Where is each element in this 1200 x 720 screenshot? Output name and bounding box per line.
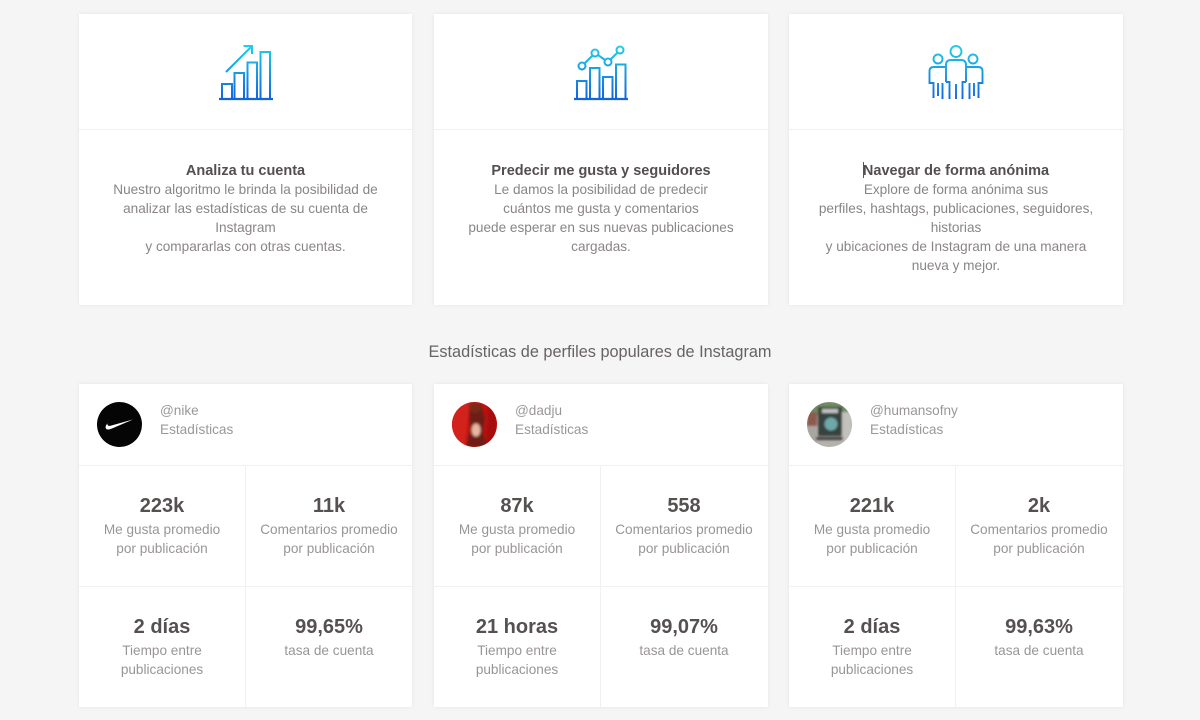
profile name: nike: Estadísticas bbox=[160, 422, 233, 437]
panel: humansofny stats bbox=[789, 384, 1123, 707]
avatar: dadju bbox=[452, 402, 497, 447]
stat: likes bbox=[814, 495, 930, 556]
stat: comments bbox=[970, 495, 1108, 556]
stat: comments: por publicación bbox=[283, 541, 375, 556]
profile name: nike bbox=[160, 403, 233, 437]
stat: time: Tiempo entre bbox=[477, 643, 557, 658]
stat: likes bbox=[104, 495, 220, 556]
stat: likes: Me gusta promedio bbox=[459, 522, 575, 537]
stat: likes bbox=[459, 495, 575, 556]
avatar: humansofny bbox=[807, 402, 852, 447]
stat: comments: 558 bbox=[667, 495, 701, 517]
stat: rate bbox=[994, 616, 1084, 658]
text: analiza tu cuenta: analizar las estadísticas de su cuenta de bbox=[123, 201, 368, 216]
text: predecir me gusta: Predecir me gusta y seguidores bbox=[491, 163, 711, 179]
stat: time bbox=[476, 616, 558, 677]
stat: likes: por publicación bbox=[826, 541, 918, 556]
stat: time: Tiempo entre bbox=[122, 643, 202, 658]
profile name: nike: @nike bbox=[160, 403, 199, 418]
stat: rate: tasa de cuenta bbox=[639, 643, 729, 658]
stat: rate: 99,07% bbox=[650, 616, 718, 638]
stat: time bbox=[121, 616, 203, 677]
stat: comments: Comentarios promedio bbox=[970, 522, 1108, 537]
profile name: dadju: Estadísticas bbox=[515, 422, 588, 437]
text: navegar de forma anonima bbox=[819, 163, 1093, 273]
stat: rate bbox=[284, 616, 374, 658]
stat: time: publicaciones bbox=[476, 662, 558, 677]
panel: analiza tu cuenta bbox=[79, 14, 412, 305]
profile name: dadju: @dadju bbox=[515, 403, 562, 418]
text: analiza tu cuenta bbox=[113, 163, 378, 254]
stat: likes: 87k bbox=[500, 495, 534, 517]
text: analiza tu cuenta: Analiza tu cuenta bbox=[186, 163, 305, 179]
avatar: nike bbox=[97, 402, 142, 447]
stat: time: 2 días bbox=[844, 616, 900, 638]
panel: predecir me gusta y seguidores bbox=[434, 14, 768, 305]
text: navegar de forma anonima: perfiles, hashtags, publicaciones, seguidores, bbox=[819, 201, 1093, 216]
stat: likes: por publicación bbox=[471, 541, 563, 556]
stat: comments: por publicación bbox=[993, 541, 1085, 556]
text: navegar de forma anonima: nueva y mejor. bbox=[912, 258, 1000, 273]
text: predecir me gusta bbox=[468, 163, 734, 254]
stat: likes: 221k bbox=[850, 495, 894, 517]
stat: rate: 99,63% bbox=[1005, 616, 1073, 638]
text: predecir me gusta: cargadas. bbox=[571, 239, 631, 254]
stat: time: Tiempo entre bbox=[832, 643, 912, 658]
text: navegar de forma anonima: historias bbox=[931, 220, 981, 235]
icon: bar chart with line bbox=[574, 46, 628, 100]
stat: rate: tasa de cuenta bbox=[284, 643, 374, 658]
stat: comments: Comentarios promedio bbox=[260, 522, 398, 537]
text: analiza tu cuenta: y compararlas con otras cuentas. bbox=[145, 239, 346, 254]
stat: comments bbox=[615, 495, 753, 556]
heading: popular profiles: Estadísticas de perfiles populares de Instagram bbox=[428, 343, 772, 361]
panel: nike stats bbox=[79, 384, 412, 707]
panel: navegar de forma anonima bbox=[789, 14, 1123, 305]
stat: comments: Comentarios promedio bbox=[615, 522, 753, 537]
profile name: humansofny: Estadísticas bbox=[870, 422, 943, 437]
stat: time: publicaciones bbox=[121, 662, 203, 677]
text: navegar de forma anonima: y ubicaciones de Instagram de una manera bbox=[826, 239, 1086, 254]
text: predecir me gusta: Le damos la posibilidad de predecir bbox=[494, 182, 708, 197]
stat: likes: Me gusta promedio bbox=[104, 522, 220, 537]
stat: rate: 99,65% bbox=[295, 616, 363, 638]
stat: comments: 11k bbox=[313, 495, 345, 517]
text: analiza tu cuenta: Nuestro algoritmo le brinda la posibilidad de bbox=[113, 182, 378, 197]
profile name: humansofny bbox=[870, 403, 958, 437]
text: navegar de forma anonima: Navegar de forma anónima bbox=[863, 163, 1049, 179]
stat: rate: tasa de cuenta bbox=[994, 643, 1084, 658]
stat: comments bbox=[260, 495, 398, 556]
stat: time bbox=[831, 616, 913, 677]
stat: likes: 223k bbox=[140, 495, 184, 517]
profile name: humansofny: @humansofny bbox=[870, 403, 958, 418]
stat: time: 21 horas bbox=[476, 616, 558, 638]
stat: rate bbox=[639, 616, 729, 658]
icon: group of people bbox=[928, 45, 984, 99]
panel: dadju stats bbox=[434, 384, 768, 707]
profile name: dadju bbox=[515, 403, 588, 437]
stat: comments: 2k bbox=[1028, 495, 1050, 517]
text: navegar de forma anonima: Explore de forma anónima sus bbox=[864, 182, 1048, 197]
text: predecir me gusta: cuántos me gusta y comentarios bbox=[503, 201, 699, 216]
text cursor bbox=[862, 162, 864, 178]
icon: growth bar chart with arrow bbox=[219, 45, 273, 100]
text: predecir me gusta: puede esperar en sus nuevas publicaciones bbox=[468, 220, 734, 235]
stat: time: publicaciones bbox=[831, 662, 913, 677]
stat: comments: por publicación bbox=[638, 541, 730, 556]
stat: likes: por publicación bbox=[116, 541, 208, 556]
stat: likes: Me gusta promedio bbox=[814, 522, 930, 537]
stat: time: 2 días bbox=[134, 616, 190, 638]
text: analiza tu cuenta: Instagram bbox=[215, 220, 276, 235]
